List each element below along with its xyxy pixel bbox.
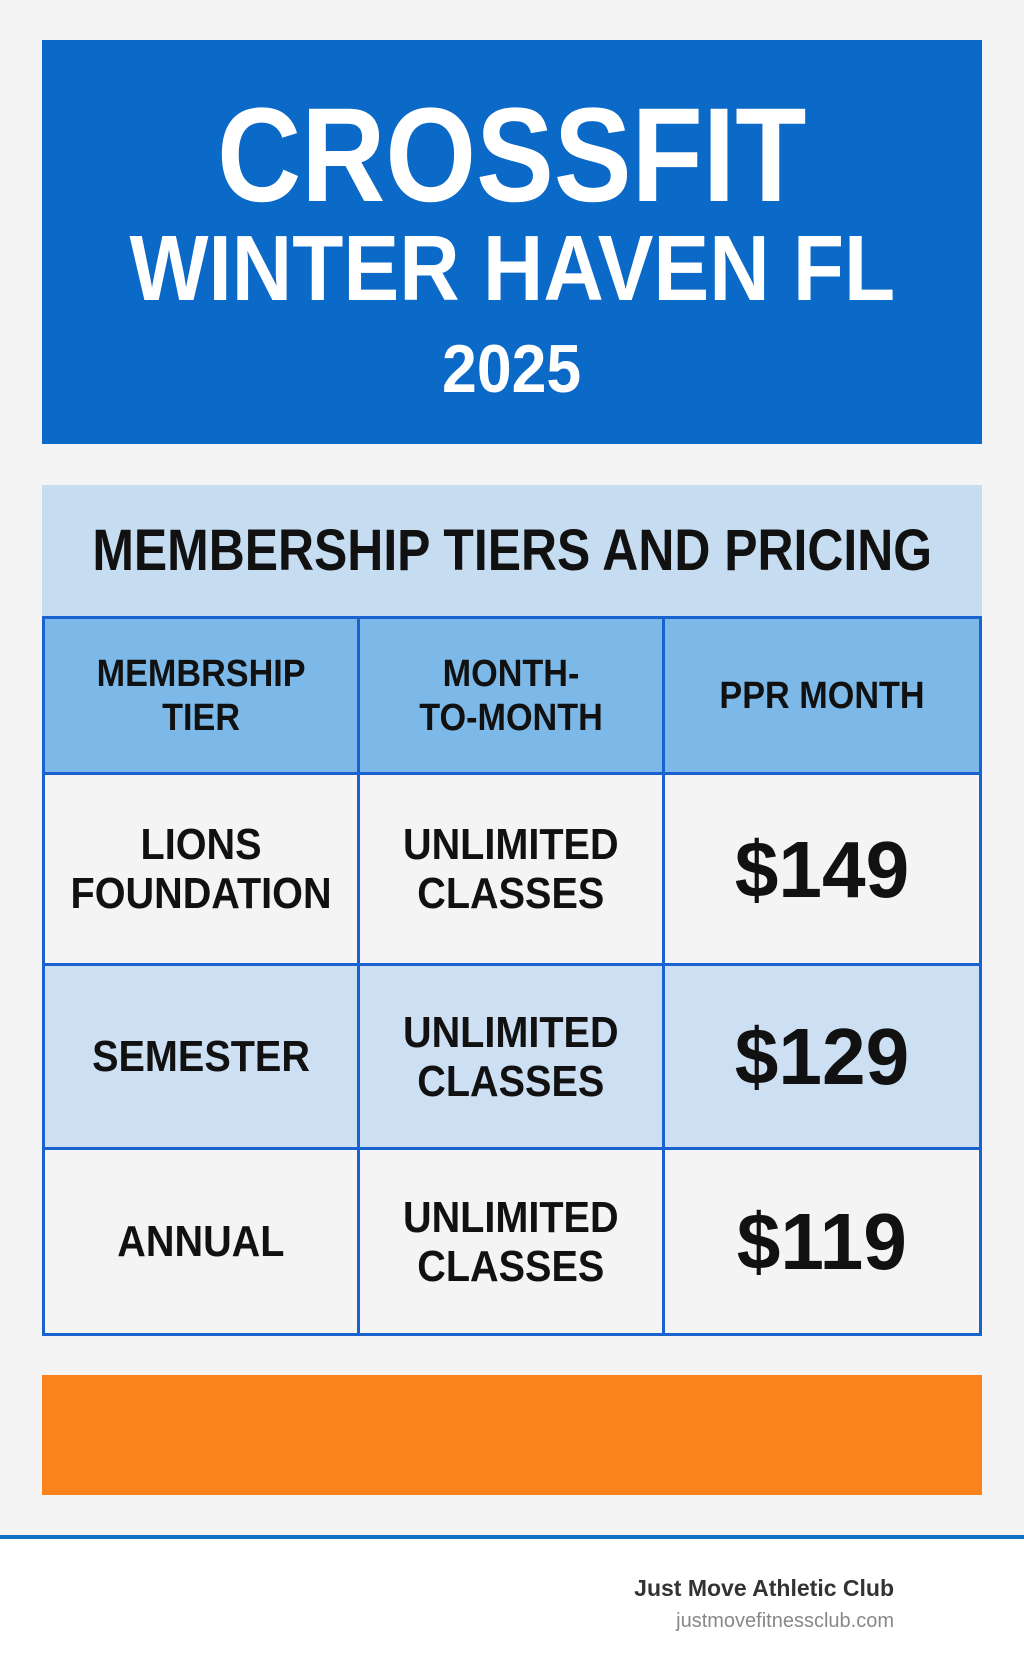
footer url: justmovefitnessclub.com xyxy=(676,1610,894,1632)
header banner xyxy=(42,40,982,444)
header: month-to-month xyxy=(357,616,665,775)
header: tier: MEMBRSHIP xyxy=(96,652,305,694)
title: CROSSFIT: CROSSFIT xyxy=(217,81,807,230)
row 3 tier xyxy=(42,1147,360,1336)
header: tier xyxy=(42,616,360,775)
row 3 price: $119 xyxy=(737,1197,907,1286)
header: per month xyxy=(662,616,982,775)
header: month-to-month: TO-MONTH xyxy=(419,696,603,738)
row 1 classes: CLASSES xyxy=(417,869,605,918)
row 2 classes: UNLIMITED xyxy=(403,1008,619,1056)
row 3 classes: CLASSES xyxy=(417,1242,605,1290)
section heading panel xyxy=(42,485,982,616)
row 3 price xyxy=(662,1147,982,1336)
row 2 classes: CLASSES xyxy=(417,1056,605,1106)
row 2 classes xyxy=(357,963,665,1150)
header: per month: PPR MONTH xyxy=(719,674,925,716)
header: month-to-month: MONTH- xyxy=(443,652,579,694)
header: tier: TIER xyxy=(162,696,240,738)
row 1 tier: FOUNDATION xyxy=(70,869,332,918)
section heading panel: MEMBERSHIP TIERS AND PRICING xyxy=(92,518,932,583)
row 2 tier: SEMESTER xyxy=(92,1032,310,1081)
row 1 classes xyxy=(357,772,665,966)
footer brand name: Just Move Athletic Club xyxy=(634,1575,894,1601)
row 1 price: $149 xyxy=(735,824,909,914)
row 1 tier: LIONS xyxy=(140,820,261,869)
orange bar xyxy=(42,1375,982,1495)
row 3 classes xyxy=(357,1147,665,1336)
row 1 tier xyxy=(42,772,360,966)
row 1 price xyxy=(662,772,982,966)
row 2 price: $129 xyxy=(735,1012,909,1101)
footer xyxy=(0,1535,1024,1666)
row 1 classes: UNLIMITED xyxy=(403,820,619,869)
pricing table xyxy=(42,616,982,1336)
row 2 tier xyxy=(42,963,360,1150)
row 3 tier: ANNUAL xyxy=(117,1217,285,1266)
row 2 price xyxy=(662,963,982,1150)
subtitle: WINTER HAVEN FL: WINTER HAVEN FL xyxy=(129,216,895,320)
year: 2025 xyxy=(442,331,582,407)
row 3 classes: UNLIMITED xyxy=(403,1192,619,1242)
